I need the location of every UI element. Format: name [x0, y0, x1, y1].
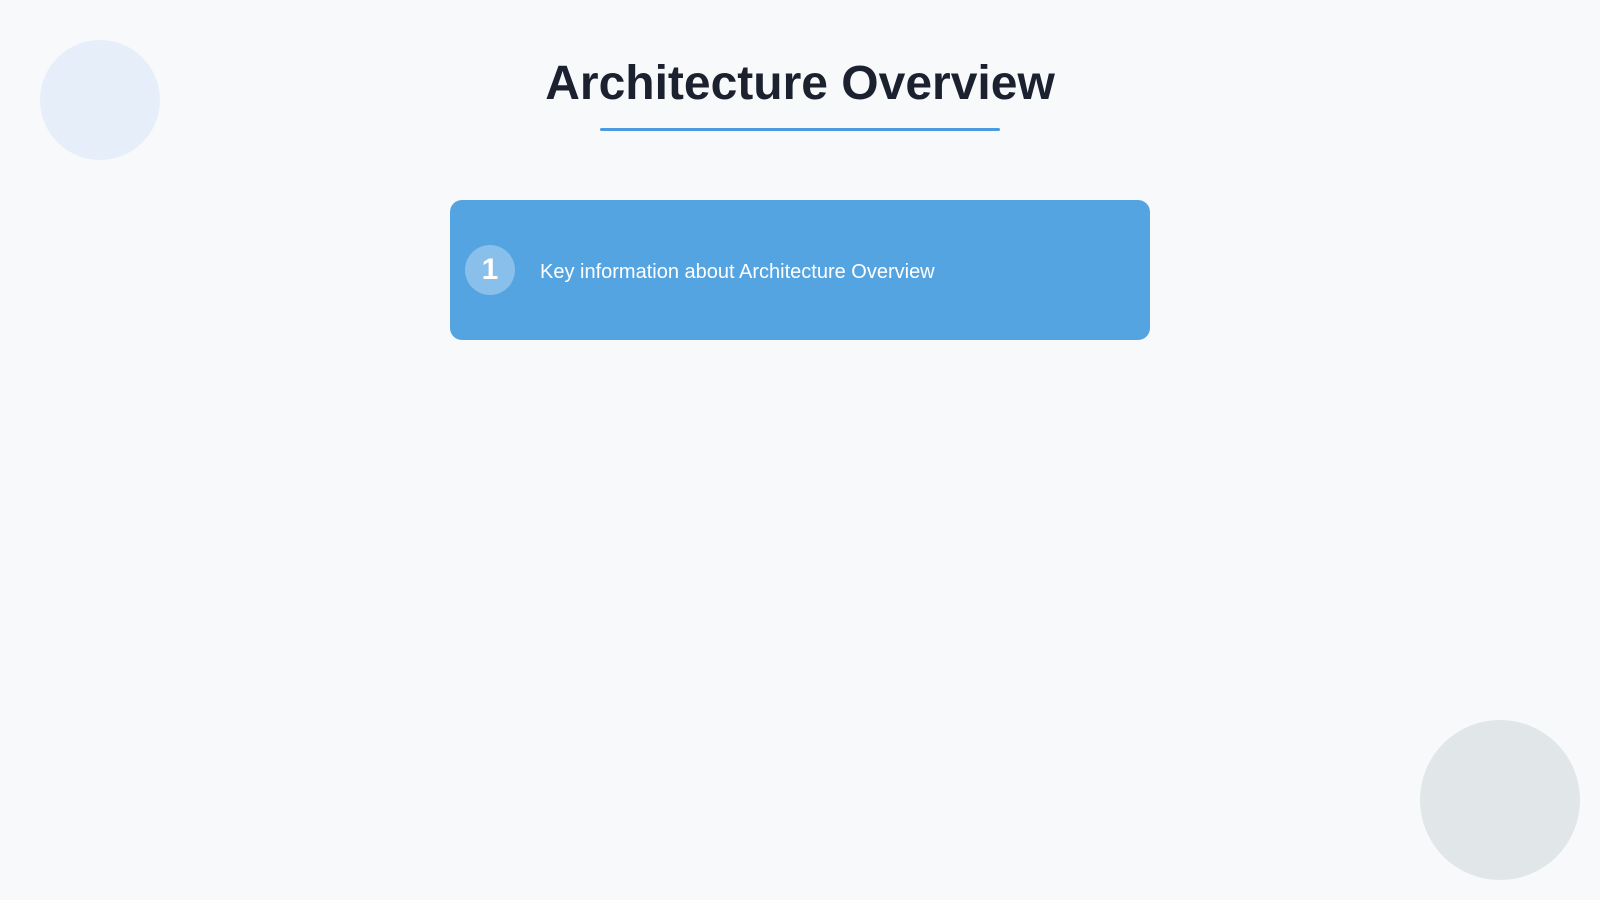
title underline: [600, 128, 1000, 131]
icon: number badge 1: [465, 245, 515, 295]
decorative circle top-left: [40, 40, 160, 160]
decorative circle bottom-right: [1420, 720, 1580, 880]
panel: key information card: [450, 200, 1150, 340]
title: Architecture Overview: [545, 57, 1055, 110]
text: key information: Key information about Architecture Overview: [540, 261, 935, 283]
icon: number badge 1: 1: [482, 253, 498, 286]
